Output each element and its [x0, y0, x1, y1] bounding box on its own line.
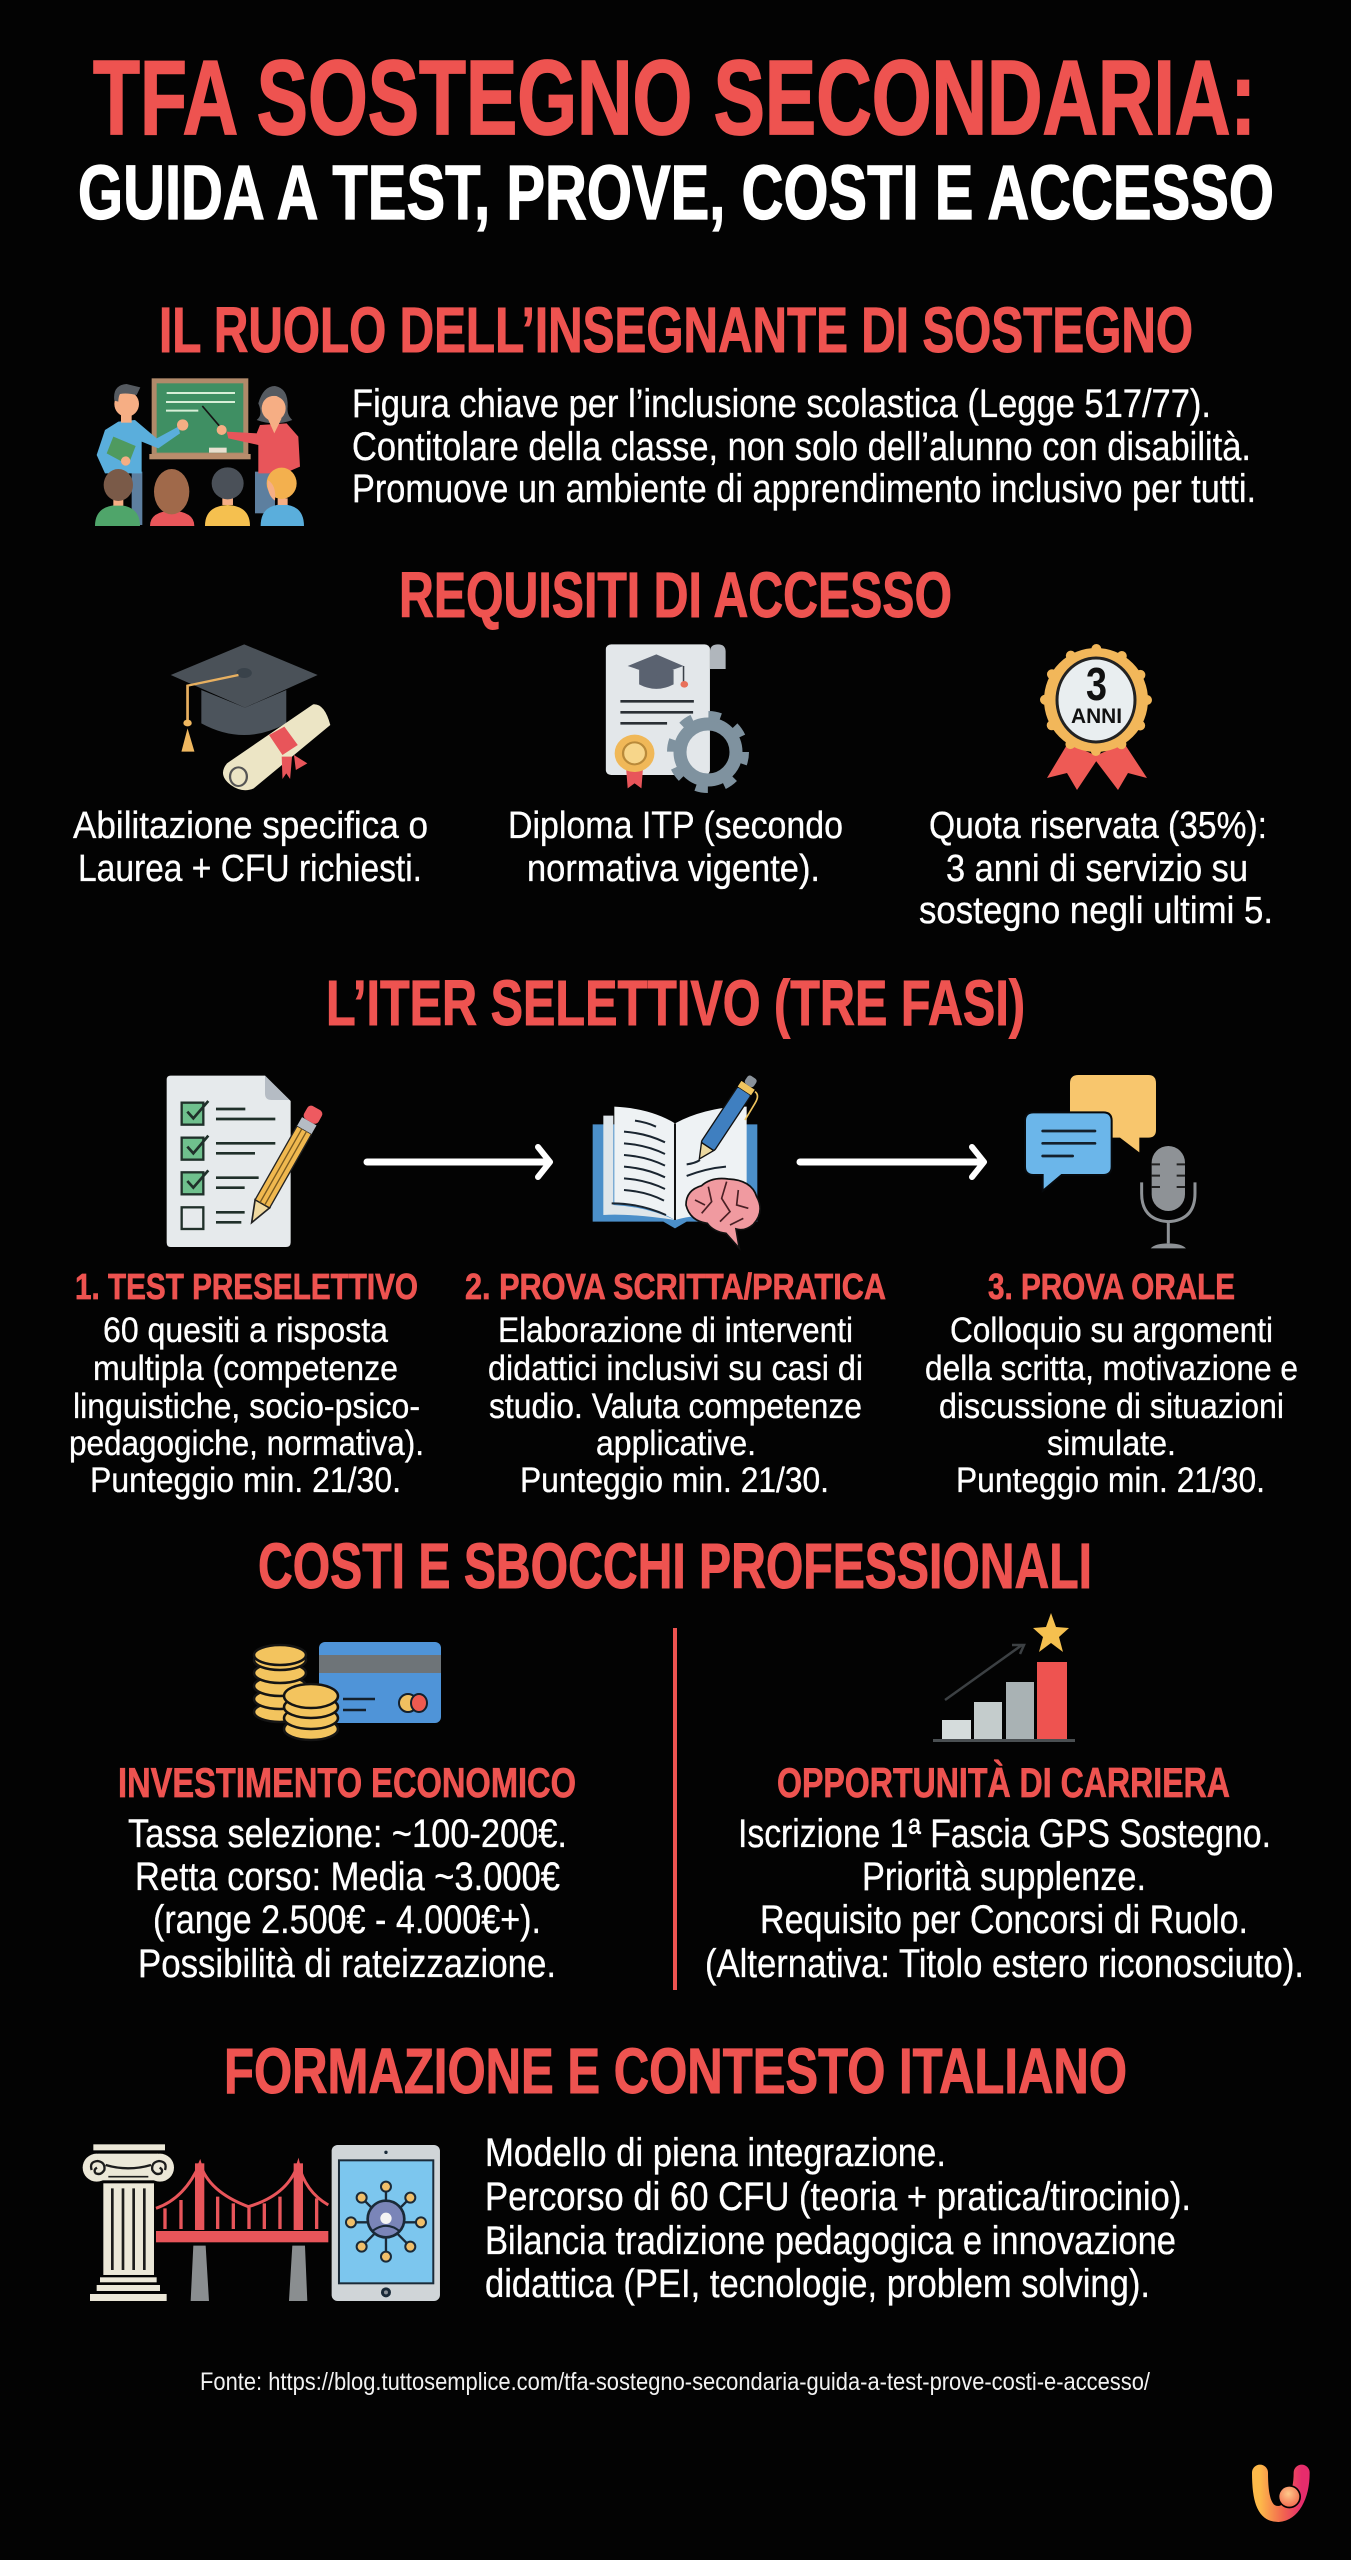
text: requisito 3: sostegno negli ultimi 5.	[919, 890, 1273, 932]
step 1: test preselettivo: Punteggio min. 21/30.	[90, 1461, 401, 1500]
step 1: test preselettivo: pedagogiche, normativa).	[69, 1424, 424, 1463]
text: formazione: didattica (PEI, tecnologie, problem solving).	[485, 2262, 1150, 2306]
icon: medal 3 anni	[1045, 649, 1147, 790]
heading: requisiti: REQUISITI DI ACCESSO	[399, 559, 952, 631]
step 3: prova orale: della scritta, motivazione e	[925, 1349, 1298, 1388]
title	[78, 39, 1274, 236]
step 2: prova scritta/pratica	[465, 1266, 886, 1500]
panel: investimento economico: Tassa selezione: ~100-200€.	[128, 1812, 567, 1856]
text: requisito 3: 3 anni di servizio su	[946, 848, 1248, 890]
source line: Fonte: https://blog.tuttosemplice.com/tfa-sostegno-secondaria-guida-a-test-prove-costi-e-accesso/	[200, 2368, 1150, 2396]
step 2: prova scritta/pratica: studio. Valuta competenze	[489, 1387, 862, 1426]
step 3: prova orale: discussione di situazioni	[939, 1387, 1284, 1426]
step 2: prova scritta/pratica: Elaborazione di interventi	[498, 1311, 853, 1350]
step 2: prova scritta/pratica: Punteggio min. 21/30.	[520, 1461, 829, 1500]
arrow: step 2 to step 3	[800, 1147, 984, 1177]
icon: medal 3 anni: 3	[1086, 658, 1107, 710]
text: requisito 3	[919, 805, 1273, 932]
step 1: test preselettivo	[69, 1266, 424, 1500]
step 1: test preselettivo: linguistiche, socio-psico-	[73, 1387, 420, 1426]
icon: column, bridge and tablet	[83, 2144, 440, 2301]
text: requisito 2	[508, 805, 843, 890]
icon: open book, pen and brain	[593, 1073, 760, 1248]
logo	[1260, 2473, 1302, 2514]
icon: speech bubbles and microphone	[1025, 1075, 1195, 1248]
step 3: prova orale: Punteggio min. 21/30.	[956, 1461, 1265, 1500]
icon: medal 3 anni: ANNI	[1071, 705, 1122, 728]
step 2: prova scritta/pratica: 2. PROVA SCRITTA/PRATICA	[465, 1266, 886, 1307]
icon: diploma and gear	[606, 644, 744, 788]
step 3: prova orale: simulate.	[1047, 1424, 1176, 1463]
panel: opportunità di carriera: Priorità supplenze.	[862, 1855, 1146, 1899]
text: formazione: Bilancia tradizione pedagogica e innovazione	[485, 2219, 1176, 2263]
arrow: step 1 to step 2	[367, 1147, 550, 1177]
text: formazione	[485, 2131, 1191, 2306]
step 3: prova orale	[925, 1266, 1298, 1500]
text: requisito 1	[73, 805, 428, 890]
icon: coins and credit card	[254, 1642, 441, 1740]
text: requisito 2: normativa vigente).	[527, 848, 820, 890]
panel: investimento economico: Retta corso: Media ~3.000€	[135, 1855, 560, 1899]
step 2: prova scritta/pratica: applicative.	[596, 1424, 756, 1463]
text: formazione: Percorso di 60 CFU (teoria + pratica/tirocinio).	[485, 2175, 1191, 2219]
step 3: prova orale: 3. PROVA ORALE	[988, 1266, 1235, 1307]
text: formazione: Modello di piena integrazione.	[485, 2131, 946, 2175]
heading: costi e sbocchi: COSTI E SBOCCHI PROFESSIONALI	[258, 1530, 1092, 1602]
panel: investimento economico: Possibilità di rateizzazione.	[138, 1942, 556, 1986]
divider	[673, 1628, 677, 1990]
panel: investimento economico: INVESTIMENTO ECONOMICO	[118, 1759, 576, 1806]
icon: teachers and students	[95, 378, 304, 526]
step 1: test preselettivo: 60 quesiti a risposta	[103, 1311, 388, 1350]
step 1: test preselettivo: multipla (competenze	[93, 1349, 398, 1388]
panel: opportunità di carriera: Requisito per Concorsi di Ruolo.	[760, 1898, 1248, 1942]
heading: iter selettivo: L’ITER SELETTIVO (TRE FASI)	[326, 967, 1025, 1039]
text: il ruolo: Figura chiave per l’inclusione scolastica (Legge 517/77).	[352, 382, 1211, 426]
text: il ruolo	[352, 382, 1256, 511]
icon: graduation cap and scroll	[171, 644, 330, 790]
icon: checklist and pencil	[167, 1076, 324, 1247]
text: requisito 2: Diploma ITP (secondo	[508, 805, 843, 847]
step 3: prova orale: Colloquio su argomenti	[950, 1311, 1273, 1350]
text: requisito 1: Abilitazione specifica o	[73, 805, 428, 847]
text: requisito 1: Laurea + CFU richiesti.	[78, 848, 422, 890]
icon: growth bar chart with star	[933, 1613, 1075, 1742]
panel: investimento economico	[118, 1759, 576, 1986]
step 1: test preselettivo: 1. TEST PRESELETTIVO	[75, 1266, 418, 1307]
text: requisito 3: Quota riservata (35%):	[929, 805, 1267, 847]
step 2: prova scritta/pratica: didattici inclusivi su casi di	[488, 1349, 863, 1388]
panel: opportunità di carriera	[705, 1759, 1304, 1986]
panel: investimento economico: (range 2.500€ - 4.000€+).	[153, 1898, 541, 1942]
